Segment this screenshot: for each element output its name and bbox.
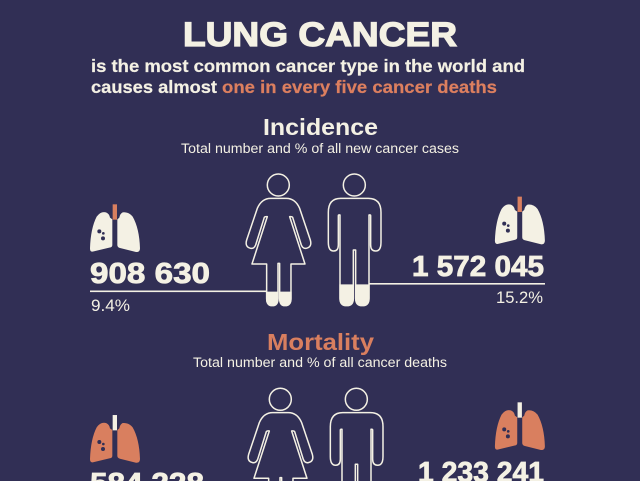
number: female incidence: 908 630 <box>90 258 210 290</box>
icon: man mortality <box>330 388 383 481</box>
heading: mortality: Mortality <box>267 329 374 355</box>
icon: orange lungs female mortality <box>90 415 140 463</box>
heading: incidence: Incidence <box>263 114 378 140</box>
icon: orange lungs male mortality <box>495 402 545 450</box>
intro text: is the most common cancer type in the world and <box>91 56 525 76</box>
icon: cream lungs female incidence <box>90 204 140 252</box>
percent: female incidence: 9.4% <box>91 296 130 315</box>
icon: woman incidence <box>246 174 311 306</box>
title: LUNG CANCER <box>183 16 457 54</box>
icon: man incidence <box>328 174 381 306</box>
leader line male incidence <box>369 283 545 285</box>
icon: woman mortality <box>248 388 313 481</box>
incidence subtitle: Total number and % of all new cancer cases <box>181 141 459 156</box>
number: male incidence: 1 572 045 <box>412 251 544 283</box>
intro text: one in every five cancer deaths <box>222 77 497 97</box>
intro text <box>91 56 525 97</box>
leader line female incidence <box>90 290 266 292</box>
mortality subtitle: Total number and % of all cancer deaths <box>193 355 447 370</box>
percent: male incidence: 15.2% <box>496 288 543 307</box>
intro text: causes almost <box>91 77 217 97</box>
icon: cream lungs male incidence <box>495 197 545 244</box>
